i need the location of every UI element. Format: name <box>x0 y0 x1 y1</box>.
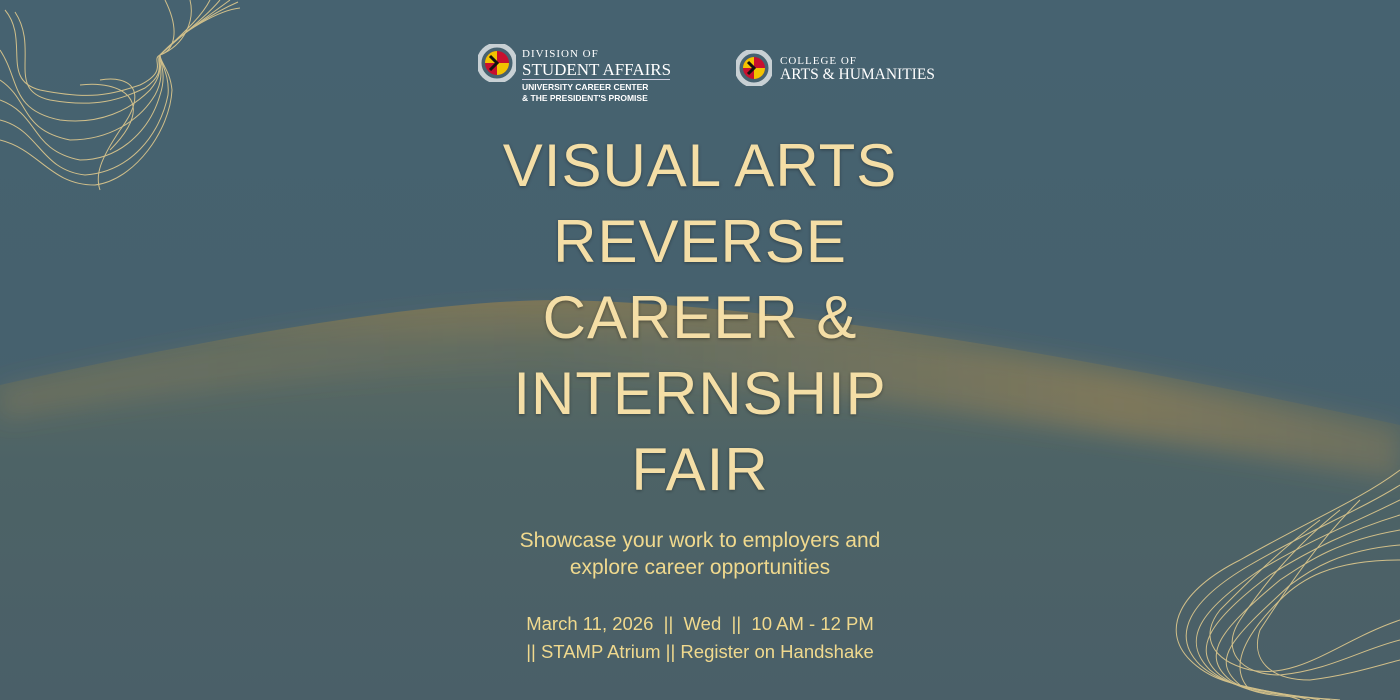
title <box>502 132 897 503</box>
logo: division of student affairs <box>478 44 671 103</box>
logo: college of arts & humanities: ARTS & HUMANITIES <box>780 66 935 83</box>
subtitle <box>520 529 880 579</box>
event details: || STAMP Atrium || Register on Handshake <box>526 641 874 662</box>
title: VISUAL ARTS <box>503 132 897 199</box>
decorative lines bottom-right <box>1176 470 1400 700</box>
title: INTERNSHIP <box>513 360 887 427</box>
title: FAIR <box>631 436 769 503</box>
title: CAREER & <box>543 284 857 351</box>
title: REVERSE <box>553 208 847 275</box>
logo: division of student affairs: DIVISION OF <box>522 48 599 60</box>
logo: division of student affairs: & THE PRESIDENT'S PROMISE <box>522 93 648 103</box>
event details: March 11, 2026 || Wed || 10 AM - 12 PM <box>526 613 874 634</box>
logo: college of arts & humanities: COLLEGE OF <box>780 55 857 67</box>
icon: UMD seal <box>478 44 516 82</box>
logo: division of student affairs: UNIVERSITY CAREER CENTER <box>522 82 648 92</box>
logo: college of arts & humanities <box>736 50 935 86</box>
subtitle: Showcase your work to employers and <box>520 529 880 552</box>
subtitle: explore career opportunities <box>570 556 830 579</box>
event details <box>526 613 874 662</box>
logo: division of student affairs: STUDENT AFFAIRS <box>522 60 671 79</box>
decorative lines top-left <box>0 0 240 190</box>
